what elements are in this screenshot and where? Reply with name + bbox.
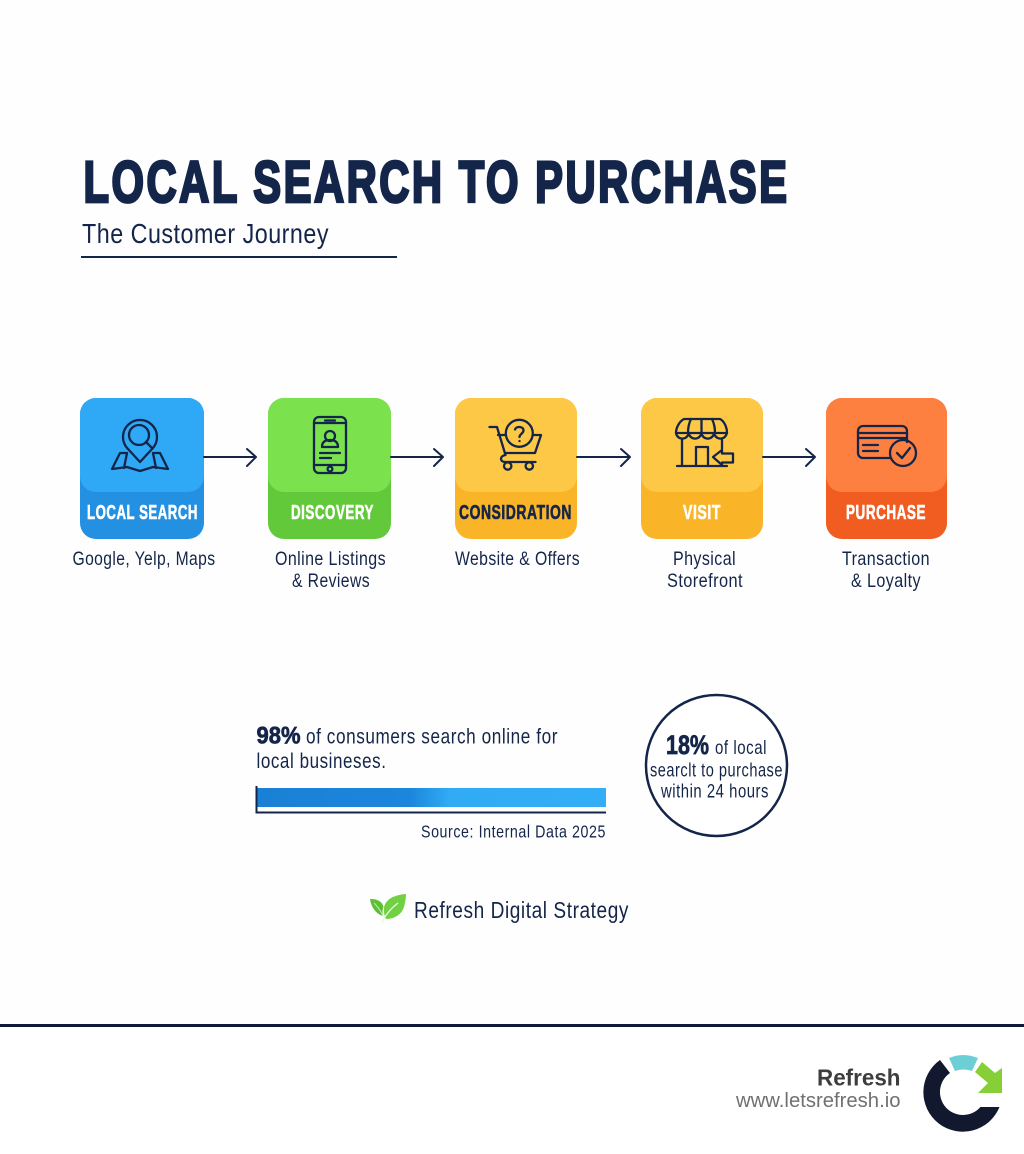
source note: Source: Internal Data 2025 [421, 822, 606, 842]
icon: credit card with check [858, 426, 916, 466]
stat text: 98 percent: 98% [256, 722, 300, 750]
callout: 18 percent circle [646, 695, 787, 836]
step 5: purchase [826, 398, 947, 539]
label: purchase: PURCHASE [846, 502, 926, 524]
arrow 2 [391, 449, 443, 466]
arrow 4 [763, 449, 815, 466]
callout: 18 percent circle: searclt to purchase [650, 760, 783, 782]
caption: discovery: Online Listings [275, 548, 386, 570]
step 1: local search [80, 398, 204, 539]
subtitle underline [81, 256, 397, 258]
bar chart: 98 percent bar [256, 786, 606, 812]
label: consideration: CONSIDRATION [459, 502, 572, 524]
callout: 18 percent circle: within 24 hours [660, 780, 769, 802]
step 3: consideration [455, 398, 577, 539]
icon: smartphone profile [314, 417, 346, 473]
caption: purchase [842, 548, 930, 592]
stat text: 98 percent: local busineses. [256, 750, 386, 773]
arrow 1 [204, 449, 256, 466]
caption: discovery [275, 548, 386, 592]
footer logo [923, 1055, 1002, 1132]
label: discovery: DISCOVERY [291, 502, 374, 524]
caption: visit: Storefront [667, 570, 743, 592]
label: local search: LOCAL SEARCH [87, 502, 198, 524]
subtitle: The Customer Journey [82, 218, 329, 249]
caption: local search: Google, Yelp, Maps [72, 548, 216, 570]
caption: consideration: Website & Offers [455, 548, 580, 570]
label: visit: VISIT [683, 502, 721, 524]
brand: strategy name: Refresh Digital Strategy [414, 897, 629, 923]
caption: discovery: & Reviews [292, 570, 370, 592]
caption: purchase: & Loyalty [851, 570, 921, 592]
step 2: discovery [268, 398, 391, 539]
footer brand name: Refresh [817, 1064, 900, 1090]
callout: 18 percent circle: of local [715, 737, 767, 759]
caption: visit: Physical [673, 548, 736, 570]
caption: visit [667, 548, 743, 592]
icon: shopping cart with question mark [490, 420, 541, 470]
step 4: visit [641, 398, 763, 539]
footer [0, 1024, 1024, 1154]
brand: leaf icon [370, 894, 406, 923]
callout: 18 percent circle: 18% [666, 730, 709, 760]
caption: purchase: Transaction [842, 548, 930, 570]
icon: map pin with magnifier [112, 420, 168, 471]
icon: storefront with arrow [676, 419, 733, 466]
arrow 3 [577, 449, 630, 466]
stat text: 98 percent [256, 722, 558, 773]
stat text: 98 percent: of consumers search online for [306, 726, 558, 748]
footer url: www.letsrefresh.io [735, 1090, 900, 1112]
